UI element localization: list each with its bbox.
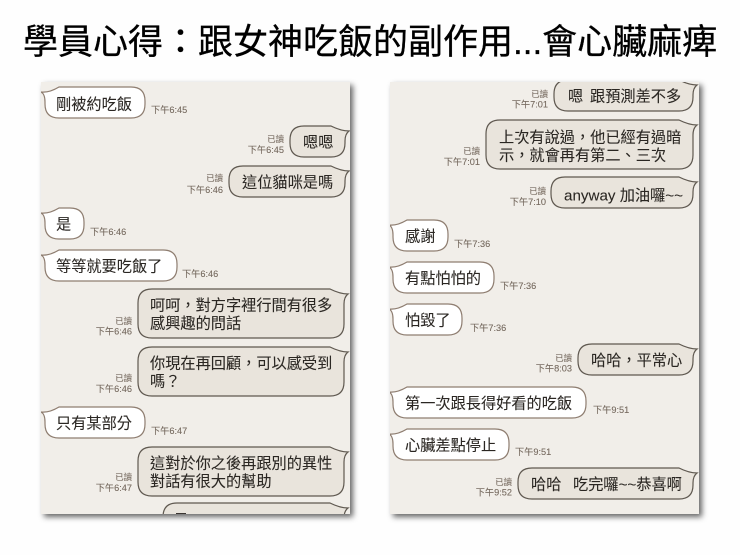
panel: right chat screenshot bbox=[389, 80, 699, 514]
left bubble: 第一次跟長得好看的吃飯: 第一次跟長得好看的吃飯 bbox=[405, 394, 572, 412]
left bubble: 有點怕怕的 bbox=[389, 262, 536, 293]
right bubble: 哈哈,平常心: 下午8:03 bbox=[536, 362, 572, 374]
right bubble: anyway 加油囉: anyway 加油囉~~ bbox=[564, 188, 683, 204]
left bubble: 剛被約吃飯 bbox=[41, 87, 187, 118]
left bubble: 只有某部分: 下午6:47 bbox=[151, 425, 187, 436]
right bubble: 呵呵: 已讀 bbox=[115, 316, 133, 326]
left bubble: 有點怕怕的: 下午7:36 bbox=[500, 280, 536, 291]
right bubble: 哈哈 吃完囉~~恭喜啊 bbox=[476, 468, 697, 499]
left bubble: 是: 是 bbox=[56, 216, 71, 234]
left bubble: 剛被約吃飯: 剛被約吃飯 bbox=[56, 96, 132, 114]
right bubble: 嗯 跟預測差不多: 已讀 bbox=[531, 89, 549, 99]
left bubble: 怕毀了 bbox=[389, 304, 506, 335]
left bubble: 有點怕怕的: 有點怕怕的 bbox=[405, 270, 481, 288]
left bubble: 第一次跟長得好看的吃飯 bbox=[389, 387, 629, 418]
right bubble: anyway 加油囉: 下午7:10 bbox=[510, 196, 546, 207]
left bubble: 剛被約吃飯: 下午6:45 bbox=[151, 104, 187, 115]
left bubble: 第一次跟長得好看的吃飯: 下午9:51 bbox=[593, 404, 629, 415]
left bubble: 等等就要吃飯了: 等等就要吃飯了 bbox=[56, 258, 162, 276]
right bubble: 這對於你之後 bbox=[96, 447, 348, 496]
left bubble: 心臟差點停止: 心臟差點停止 bbox=[405, 438, 496, 454]
right bubble: 你現在再回顧 bbox=[96, 347, 348, 396]
right bubble: 你現在再回顧: 嗎？ bbox=[150, 374, 180, 390]
right bubble: 上次有說過 bbox=[444, 120, 697, 169]
right bubble: 這對於你之後: 這對於你之後再跟別的異性 bbox=[150, 454, 332, 472]
right bubble: cropped at panel bottom bbox=[162, 502, 350, 514]
left bubble: 等等就要吃飯了: 下午6:46 bbox=[182, 268, 218, 279]
right bubble: 哈哈 吃完囉~~恭喜啊: 下午9:52 bbox=[476, 486, 512, 498]
panel: left chat screenshot bbox=[41, 82, 350, 538]
right bubble: 你現在再回顧: 下午6:46 bbox=[96, 383, 132, 394]
right bubble: 呵呵: 感興趣的問話 bbox=[150, 314, 241, 332]
right bubble: 這對於你之後: 已讀 bbox=[115, 472, 133, 482]
right bubble: 你現在再回顧: 你現在再回顧，可以感受到 bbox=[150, 354, 332, 372]
right bubble: 上次有說過: 已讀 bbox=[463, 146, 481, 156]
right bubble: 哈哈 吃完囉~~恭喜啊: 哈哈 bbox=[531, 476, 561, 494]
right bubble: anyway 加油囉 bbox=[510, 177, 697, 208]
left bubble: 怕毀了: 下午7:36 bbox=[470, 322, 506, 333]
right bubble: 哈哈 吃完囉~~恭喜啊: 吃完囉~~恭喜啊 bbox=[573, 476, 682, 494]
right bubble: 上次有說過: 示，就會再有第二、三次 bbox=[499, 146, 666, 164]
right bubble: 上次有說過: 上次有說過，他已經有過暗 bbox=[499, 130, 681, 146]
left bubble: 感謝: 感謝 bbox=[405, 228, 435, 246]
right bubble: 哈哈,平常心 bbox=[536, 344, 697, 375]
left bubble: 是: 下午6:46 bbox=[90, 226, 126, 237]
right bubble: 這對於你之後: 對話有很大的幫助 bbox=[150, 474, 272, 490]
right bubble: 呵呵 bbox=[96, 289, 348, 338]
right bubble: 這對於你之後: 下午6:47 bbox=[96, 482, 132, 493]
right bubble: 嗯嗯: 下午6:45 bbox=[248, 144, 284, 155]
left bubble: 怕毀了: 怕毀了 bbox=[405, 312, 451, 330]
right bubble: 呵呵: 呵呵，對方字裡行間有很多 bbox=[150, 296, 332, 314]
right bubble: 上次有說過: 下午7:01 bbox=[444, 156, 480, 167]
right bubble: 嗯 跟預測差不多: 嗯 bbox=[568, 88, 583, 106]
left bubble: 感謝 bbox=[389, 220, 490, 251]
right bubble: anyway 加油囉: 已讀 bbox=[529, 186, 547, 196]
right bubble: 嗯嗯: 嗯嗯 bbox=[303, 134, 333, 152]
right bubble: 這位貓咪是嗎 bbox=[187, 166, 349, 197]
right bubble: 哈哈 吃完囉~~恭喜啊: 已讀 bbox=[495, 477, 513, 487]
right bubble: 嗯 跟預測差不多: 跟預測差不多 bbox=[590, 88, 681, 106]
right bubble: 呵呵: 下午6:46 bbox=[96, 326, 132, 336]
left bubble: 等等就要吃飯了 bbox=[41, 250, 218, 281]
right bubble: 嗯 跟預測差不多 bbox=[512, 80, 697, 111]
right bubble: 哈哈,平常心: 哈哈，平常心 bbox=[591, 352, 682, 370]
right bubble: 嗯嗯: 已讀 bbox=[267, 134, 285, 144]
right bubble: 這位貓咪是嗎: 這位貓咪是嗎 bbox=[242, 174, 333, 192]
title: 學員心得：跟女神吃飯的副作用...會心臟麻痺 bbox=[23, 23, 717, 62]
left bubble: 心臟差點停止 bbox=[389, 429, 551, 460]
right bubble: 你現在再回顧: 已讀 bbox=[115, 373, 133, 383]
right bubble: 這位貓咪是嗎: 已讀 bbox=[206, 173, 224, 183]
right bubble: 嗯嗯 bbox=[248, 126, 349, 157]
right bubble: 這位貓咪是嗎: 下午6:46 bbox=[187, 184, 223, 195]
left bubble: 感謝: 下午7:36 bbox=[454, 238, 490, 249]
right bubble: 哈哈,平常心: 已讀 bbox=[555, 353, 573, 363]
left bubble: 是 bbox=[41, 208, 126, 239]
left bubble: 只有某部分: 只有某部分 bbox=[56, 416, 132, 432]
right bubble: 嗯 跟預測差不多: 下午7:01 bbox=[512, 98, 548, 110]
left bubble: 只有某部分 bbox=[41, 407, 187, 438]
left bubble: 心臟差點停止: 下午9:51 bbox=[515, 446, 551, 457]
